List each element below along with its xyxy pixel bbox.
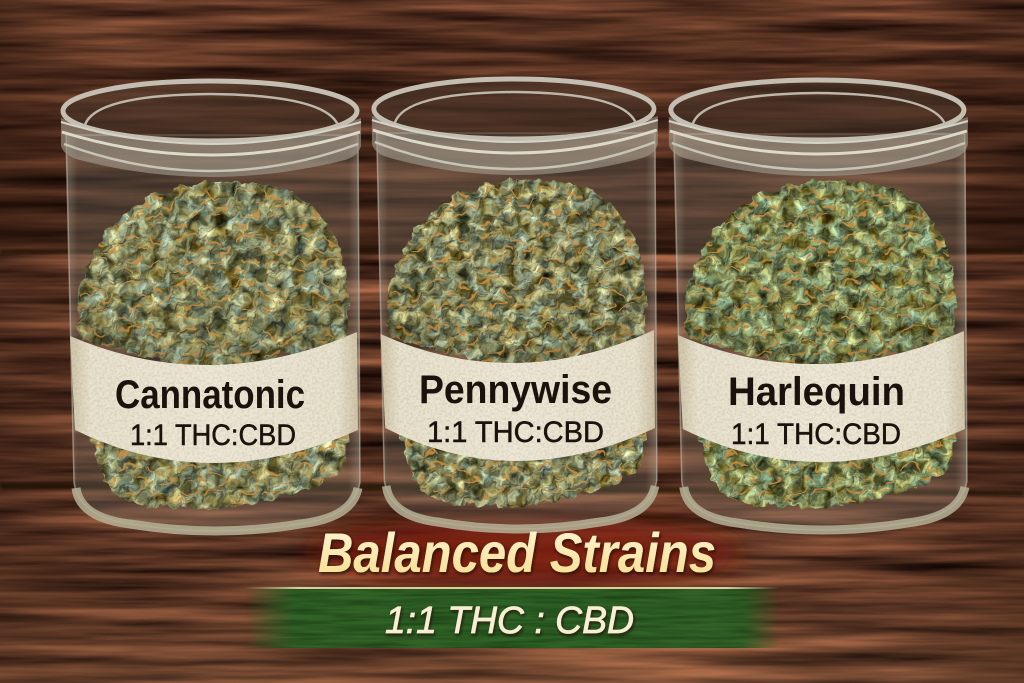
jar rim: [61, 81, 361, 177]
glass side reflections: [66, 135, 360, 531]
paper label: [678, 331, 965, 462]
glass body: [674, 134, 967, 530]
paper label: [70, 332, 358, 463]
paper label: [381, 330, 655, 461]
label text: Pennywise: Pennywise: [419, 368, 612, 412]
label text: Cannatonic: Cannatonic: [115, 373, 305, 417]
glass base: [386, 486, 655, 529]
upper buds: [386, 178, 648, 363]
upper buds: [76, 180, 350, 365]
lower buds: [399, 432, 647, 508]
jar: Harlequin: [668, 80, 972, 530]
glass side reflections: [674, 134, 967, 530]
upper buds: [684, 178, 958, 364]
red glow behind title: [310, 518, 740, 586]
glass side reflections: [377, 133, 657, 529]
title: Balanced Strains: [318, 521, 716, 584]
banner text: 1:1 THC : CBD: [385, 600, 634, 642]
jar: Pennywise: [371, 79, 662, 529]
label text: ratio: 1:1 THC:CBD: [130, 419, 296, 452]
glass base: [76, 488, 358, 531]
label text: Harlequin: Harlequin: [728, 370, 905, 414]
glass body: [66, 135, 360, 531]
jar rim: [372, 79, 658, 175]
glass body: [377, 133, 657, 529]
lower buds: [697, 433, 956, 510]
label text: ratio: 1:1 THC:CBD: [427, 416, 604, 449]
lower buds: [90, 434, 350, 510]
jar rim: [669, 80, 968, 176]
green ratio banner: [245, 587, 780, 648]
glass base: [684, 487, 965, 530]
label text: ratio: 1:1 THC:CBD: [731, 418, 901, 451]
jar: Cannatonic: [60, 81, 365, 531]
